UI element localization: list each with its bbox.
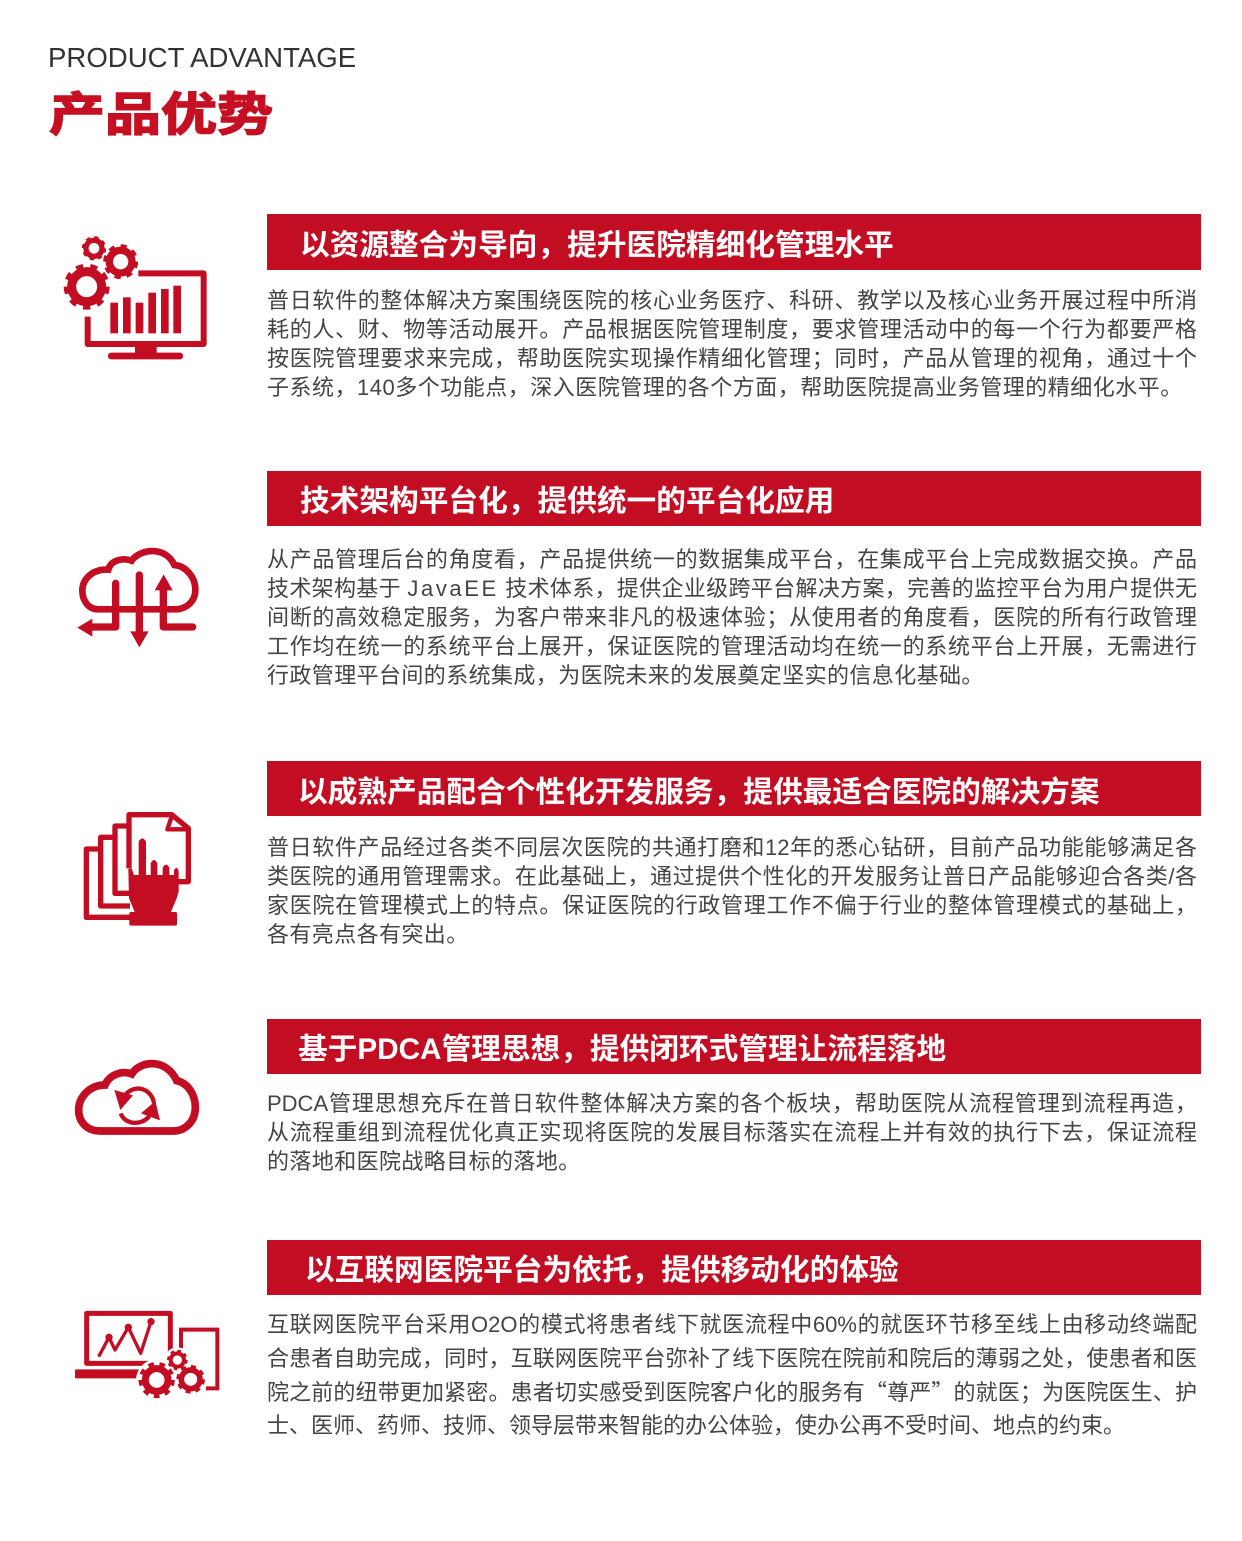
section heading: 以互联网医院平台为依托，提供移动化的体验 xyxy=(305,1254,899,1287)
body text: 耗的人、财、物等活动展开。产品根据医院管理制度，要求管理活动中的每一个行为都要严格 xyxy=(267,316,1197,342)
body text: PDCA管理思想充斥在普日软件整体解决方案的各个板块，帮助医院从流程管理到流程再造， xyxy=(267,1090,1197,1116)
body text: 类医院的通用管理需求。在此基础上，通过提供个性化的开发服务让普日产品能够迎合各类/各 xyxy=(267,864,1197,888)
body text: 院之前的纽带更加紧密。患者切实感受到医院客户化的服务有“尊严”的就医；为医院医生、护 xyxy=(267,1375,1197,1407)
heading: English title: PRODUCT ADVANTAGE xyxy=(48,42,356,73)
body text: 家医院在管理模式上的特点。保证医院的行政管理工作不偏于行业的整体管理模式的基础上， xyxy=(267,892,1197,918)
body text: 间断的高效稳定服务，为客户带来非凡的极速体验；从使用者的角度看，医院的所有行政管理 xyxy=(267,604,1197,630)
body text: 从产品管理后台的角度看，产品提供统一的数据集成平台，在集成平台上完成数据交换。产品 xyxy=(267,546,1197,572)
panel: mature products and customization xyxy=(84,761,1201,946)
icon: cloud with cycle arrows xyxy=(74,1060,200,1135)
body text: 技术架构基于 JavaEE 技术体系，提供企业级跨平台解决方案，完善的监控平台为用户提供无 xyxy=(267,576,1197,600)
section heading: 技术架构平台化，提供统一的平台化应用 xyxy=(300,485,834,518)
body text: 士、医师、药师、技师、领导层带来智能的办公体验，使办公再不受时间、地点的约束。 xyxy=(267,1413,1125,1438)
section heading xyxy=(267,1240,1201,1295)
body text: 合患者自助完成，同时，互联网医院平台弥补了线下医院在院前和院后的薄弱之处，使患者和医 xyxy=(267,1346,1197,1371)
icon: documents with hand xyxy=(84,812,191,926)
body text: 的落地和医院战略目标的落地。 xyxy=(267,1148,581,1174)
panel: PDCA management xyxy=(74,1019,1201,1174)
section heading xyxy=(267,761,1201,816)
icon: cloud with arrows xyxy=(77,548,199,648)
body text: 普日软件产品经过各类不同层次医院的共通打磨和12年的悉心钻研，目前产品功能能够满足各 xyxy=(267,834,1197,860)
section heading: 基于PDCA管理思想，提供闭环式管理让流程落地 xyxy=(298,1033,946,1066)
body text: 行政管理平台间的系统集成，为医院未来的发展奠定坚实的信息化基础。 xyxy=(267,662,984,688)
body text xyxy=(267,834,1197,946)
section heading xyxy=(267,214,1201,270)
body text: 按医院管理要求来完成，帮助医院实现操作精细化管理；同时，产品从管理的视角，通过十个 xyxy=(267,346,1197,370)
icon: monitor with gears xyxy=(64,236,207,360)
body text xyxy=(267,1312,1197,1438)
body text: 子系统，140多个功能点，深入医院管理的各个方面，帮助医院提高业务管理的精细化水平。 xyxy=(267,374,1183,400)
body text: 各有亮点各有突出。 xyxy=(267,922,469,946)
section heading: 以成熟产品配合个性化开发服务，提供最适合医院的解决方案 xyxy=(298,776,1100,809)
body text xyxy=(267,546,1197,688)
body text: 互联网医院平台采用O2O的模式将患者线下就医流程中60%的就医环节移至线上由移动终端配 xyxy=(267,1312,1197,1337)
body text: 工作均在统一的系统平台上展开，保证医院的管理活动均在统一的系统平台上开展，无需进行 xyxy=(267,634,1197,658)
section heading xyxy=(267,471,1201,526)
panel: internet hospital platform xyxy=(74,1240,1201,1438)
heading: Chinese title: 产品优势 xyxy=(49,89,273,140)
body text: 普日软件的整体解决方案围绕医院的核心业务医疗、科研、教学以及核心业务开展过程中所消 xyxy=(267,288,1197,312)
icon: laptop, tablet and gears xyxy=(74,1310,220,1398)
panel: platform architecture xyxy=(77,471,1201,688)
body text: 从流程重组到流程优化真正实现将医院的发展目标落实在流程上并有效的执行下去，保证流程 xyxy=(267,1120,1197,1144)
section heading xyxy=(267,1019,1201,1074)
body text xyxy=(267,288,1197,400)
body text xyxy=(267,1090,1197,1174)
section heading: 以资源整合为导向，提升医院精细化管理水平 xyxy=(300,229,894,262)
panel: resource integration xyxy=(64,214,1201,400)
